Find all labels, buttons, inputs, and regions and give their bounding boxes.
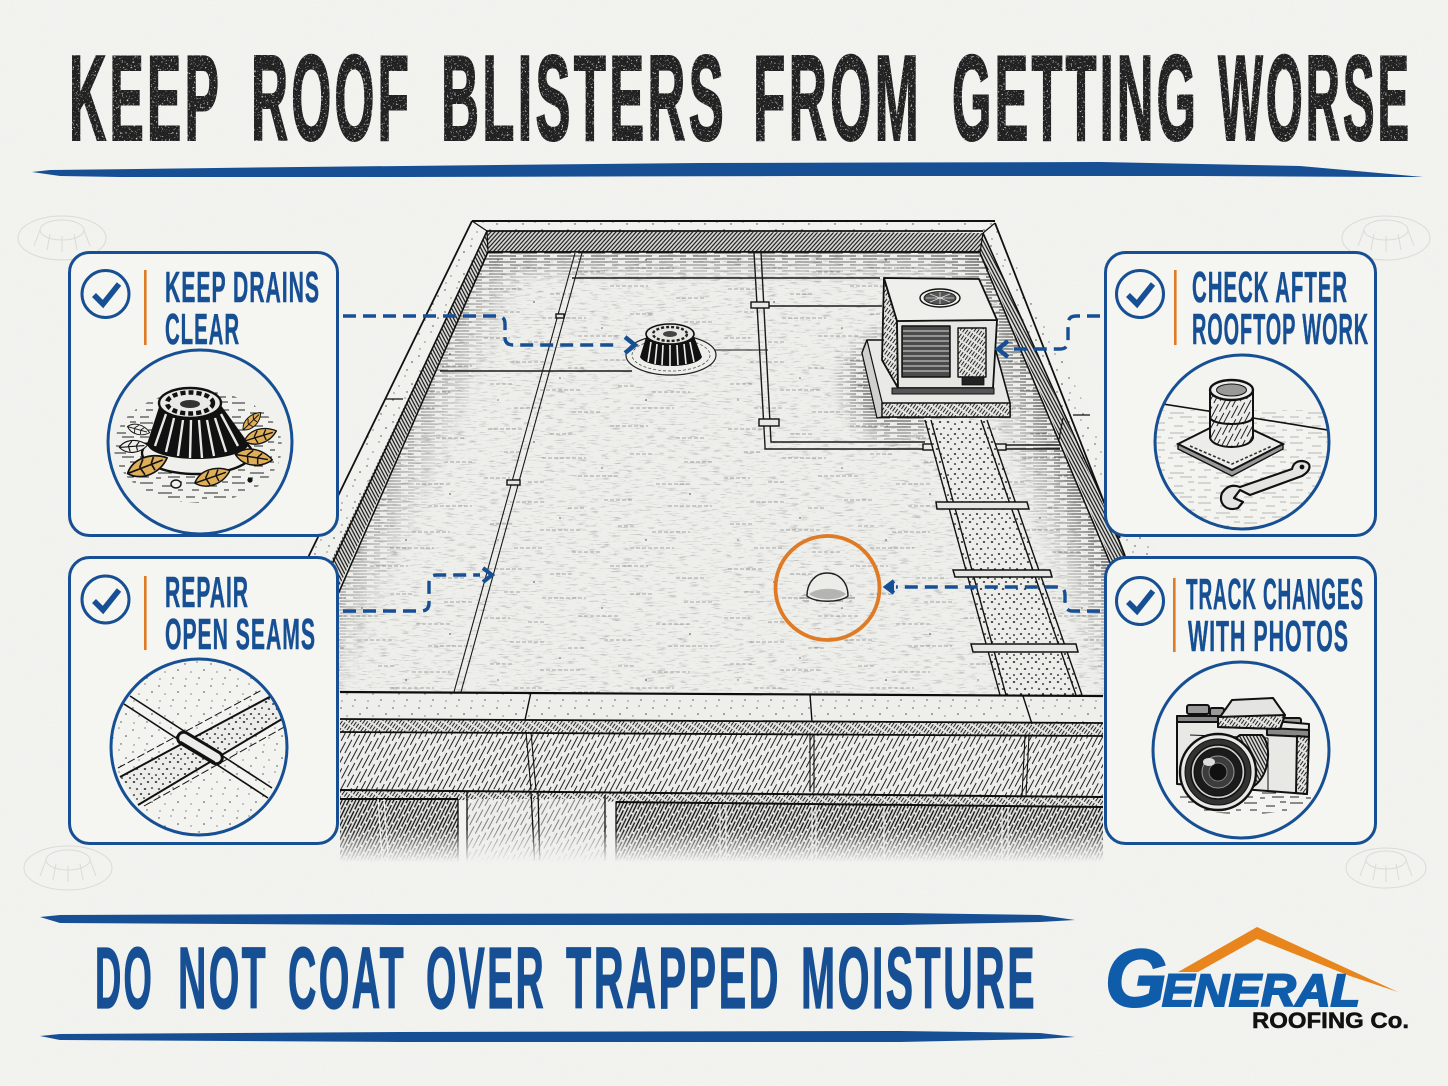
title: BLISTERS	[441, 30, 727, 166]
icon: clogged drain with leaves	[108, 350, 292, 534]
panel: keep drains clear: KEEP DRAINS	[165, 263, 320, 312]
title	[69, 30, 1412, 166]
accent bar	[1173, 578, 1176, 652]
faint corner drain watermarks	[18, 216, 1430, 890]
bottom rule upper	[40, 913, 1075, 925]
logo tagline: ROOFING Co.	[1252, 1008, 1409, 1033]
bottom message: TRAPPED	[566, 930, 781, 1027]
roof illustration	[308, 220, 1149, 861]
heading: CLEAR	[165, 305, 240, 354]
panel: track changes with photos	[1106, 558, 1376, 844]
panel: keep drains clear	[70, 252, 338, 536]
membrane seams	[440, 252, 1060, 692]
bottom message: DO	[95, 930, 154, 1027]
roof membrane surface	[339, 251, 1110, 696]
title: ROOF	[251, 30, 412, 166]
logo roof	[1178, 927, 1398, 992]
logo wordmark: G	[1105, 933, 1167, 1024]
roof drain	[626, 324, 716, 375]
panel: repair open seams: OPEN SEAMS	[165, 610, 316, 659]
logo wordmark: ENERAL	[1162, 965, 1360, 1016]
bottom message: OVER	[426, 930, 546, 1027]
parapet and coping	[240, 221, 1230, 700]
icon: check mark	[1116, 578, 1164, 624]
walkway pad	[925, 420, 1082, 695]
blister highlighted in orange circle	[776, 536, 880, 640]
heading	[165, 263, 320, 354]
heading	[165, 568, 316, 659]
arrow: repair open seams to seam	[343, 568, 492, 611]
accent bar	[1174, 270, 1177, 345]
panel: repair open seams	[70, 558, 338, 844]
seam straps	[507, 302, 1006, 485]
title: FROM	[753, 30, 922, 166]
bottom rule lower	[40, 1031, 1075, 1042]
icon: check mark	[82, 576, 129, 623]
bottom message	[95, 930, 1037, 1027]
arrow: check after rooftop work to HVAC unit	[998, 316, 1100, 357]
heading: REPAIR	[165, 568, 249, 617]
arrow: track changes with photos to blister	[886, 581, 1100, 611]
icon: check mark	[1116, 270, 1164, 318]
accent bar	[144, 576, 147, 650]
panel: check after rooftop work	[1106, 252, 1376, 536]
heading	[1192, 263, 1369, 354]
title underline stroke	[32, 162, 1423, 177]
icon: pipe flashing and wrench	[1150, 355, 1340, 530]
accent bar	[144, 270, 147, 345]
logo: General Roofing Co.	[1105, 927, 1409, 1033]
title: KEEP	[69, 30, 222, 166]
bottom message: COAT	[288, 930, 406, 1027]
icon: seam repair	[110, 659, 292, 835]
heading	[1186, 570, 1364, 661]
text: MOISTURE	[801, 930, 1037, 1027]
arrow: keep drains clear to roof drain	[343, 316, 635, 353]
front parapet wall	[340, 692, 1103, 869]
icon: check mark	[82, 270, 129, 318]
icon: camera	[1153, 662, 1329, 838]
bottom message: NOT	[178, 930, 268, 1027]
logo wordmark	[1105, 933, 1360, 1024]
rooftop HVAC unit	[862, 278, 1010, 418]
